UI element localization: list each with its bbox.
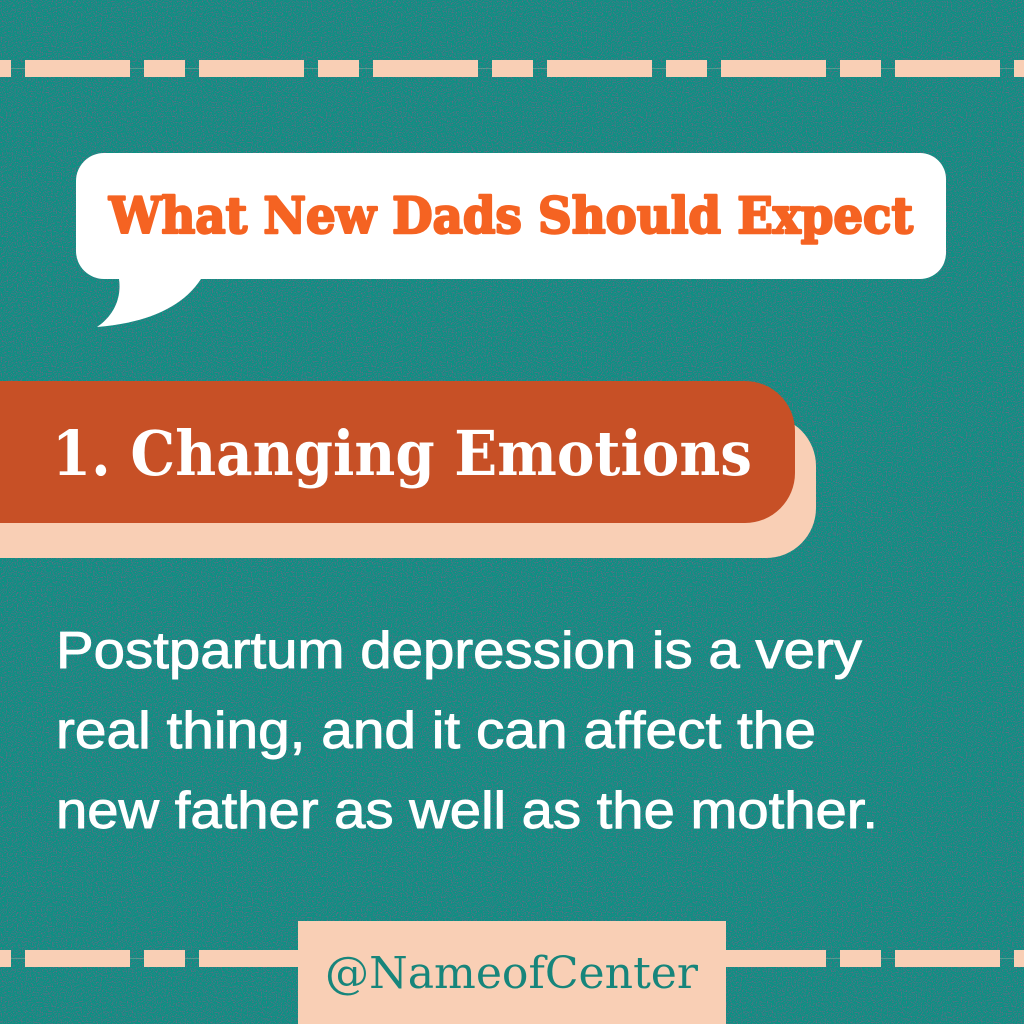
body text bbox=[56, 622, 878, 840]
tag box bbox=[298, 921, 726, 1024]
title text: What New Dads Should Expect bbox=[108, 186, 913, 245]
body text: Postpartum depression is a very bbox=[56, 622, 862, 680]
bottom dashed border bbox=[0, 950, 1024, 967]
section heading banner bbox=[0, 381, 816, 558]
body text: new father as well as the mother. bbox=[56, 782, 878, 840]
banner fill bbox=[0, 381, 795, 523]
heading text: 1. Changing Emotions bbox=[52, 417, 752, 490]
handle text: @NameofCenter bbox=[325, 948, 699, 999]
body text: real thing, and it can affect the bbox=[56, 702, 816, 760]
speech bubble title bbox=[76, 153, 946, 327]
banner shadow bbox=[0, 416, 816, 558]
top dashed border bbox=[0, 60, 1024, 77]
handle tag bbox=[298, 921, 726, 1024]
bubble shape bbox=[76, 153, 946, 327]
